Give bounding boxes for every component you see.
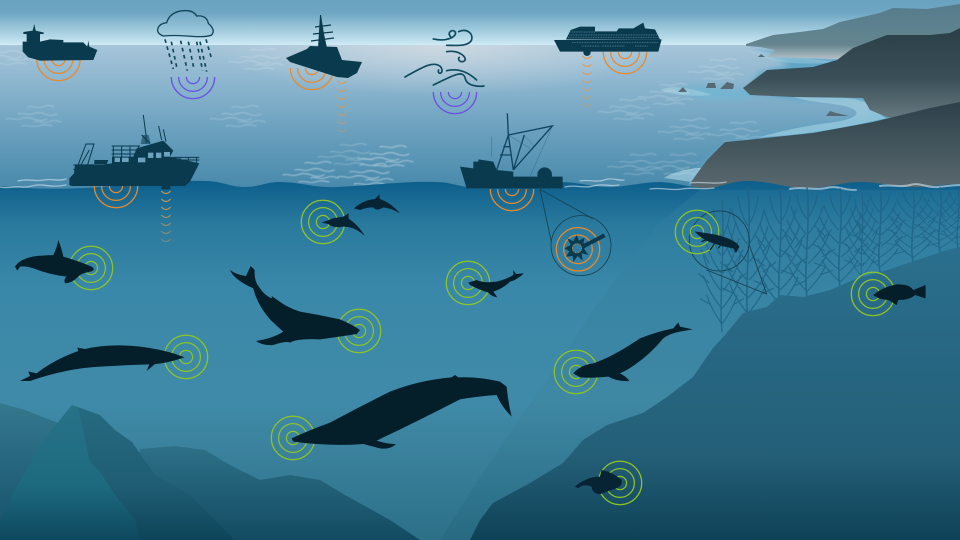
fishing vessel bbox=[460, 113, 563, 188]
callout: hydrophone detail bbox=[540, 189, 611, 276]
whitecaps bbox=[0, 44, 763, 175]
fin whale bbox=[20, 345, 184, 381]
cruise ship bbox=[554, 23, 662, 56]
green rings: marine animals bbox=[69, 200, 895, 505]
rain cloud bbox=[158, 11, 213, 72]
small whale bbox=[468, 270, 524, 297]
light distant slope bbox=[440, 190, 960, 540]
hydrophone orange rings bbox=[556, 228, 600, 271]
second ridge bbox=[130, 446, 355, 540]
main peak bbox=[0, 405, 235, 540]
cargo ship bbox=[23, 24, 97, 61]
coastline: far hills bbox=[746, 4, 960, 62]
research vessel bbox=[69, 115, 199, 189]
grouper fish bbox=[873, 284, 926, 305]
orca bbox=[15, 240, 94, 283]
wind and waves bbox=[405, 30, 484, 86]
far left mountain bbox=[0, 403, 100, 540]
blue whale bbox=[292, 375, 512, 449]
callout: lobster detail bbox=[689, 211, 767, 294]
foam along coast bbox=[660, 50, 887, 182]
third ridge bbox=[230, 475, 420, 540]
seal bbox=[575, 470, 622, 494]
coastal shallow water bbox=[680, 48, 960, 190]
hydrophone device bbox=[583, 235, 605, 247]
sea surface bbox=[0, 45, 960, 191]
gray whale bbox=[573, 322, 693, 381]
humpback whale bbox=[230, 266, 360, 345]
teal peak face bbox=[0, 405, 140, 540]
sea rocks bbox=[678, 54, 849, 116]
purple rings: rain and wind bbox=[171, 77, 477, 114]
sonar pings bbox=[161, 56, 592, 242]
sky bbox=[0, 0, 960, 46]
naval ship bbox=[286, 15, 362, 78]
lobster bbox=[695, 232, 739, 253]
coastline: near cliff bbox=[691, 102, 960, 195]
main right seabed slope bbox=[470, 247, 960, 540]
coastline: middle cliff bbox=[743, 28, 960, 130]
burst pattern bbox=[564, 235, 590, 262]
left seamounts bbox=[0, 403, 420, 540]
kelp forest bbox=[698, 186, 960, 332]
dolphins bbox=[322, 194, 400, 236]
orange noise rings: ships bbox=[37, 52, 647, 211]
underwater background bbox=[0, 181, 960, 540]
surface wave highlights bbox=[0, 179, 960, 190]
brighter whitecaps near the surface bbox=[283, 146, 413, 185]
